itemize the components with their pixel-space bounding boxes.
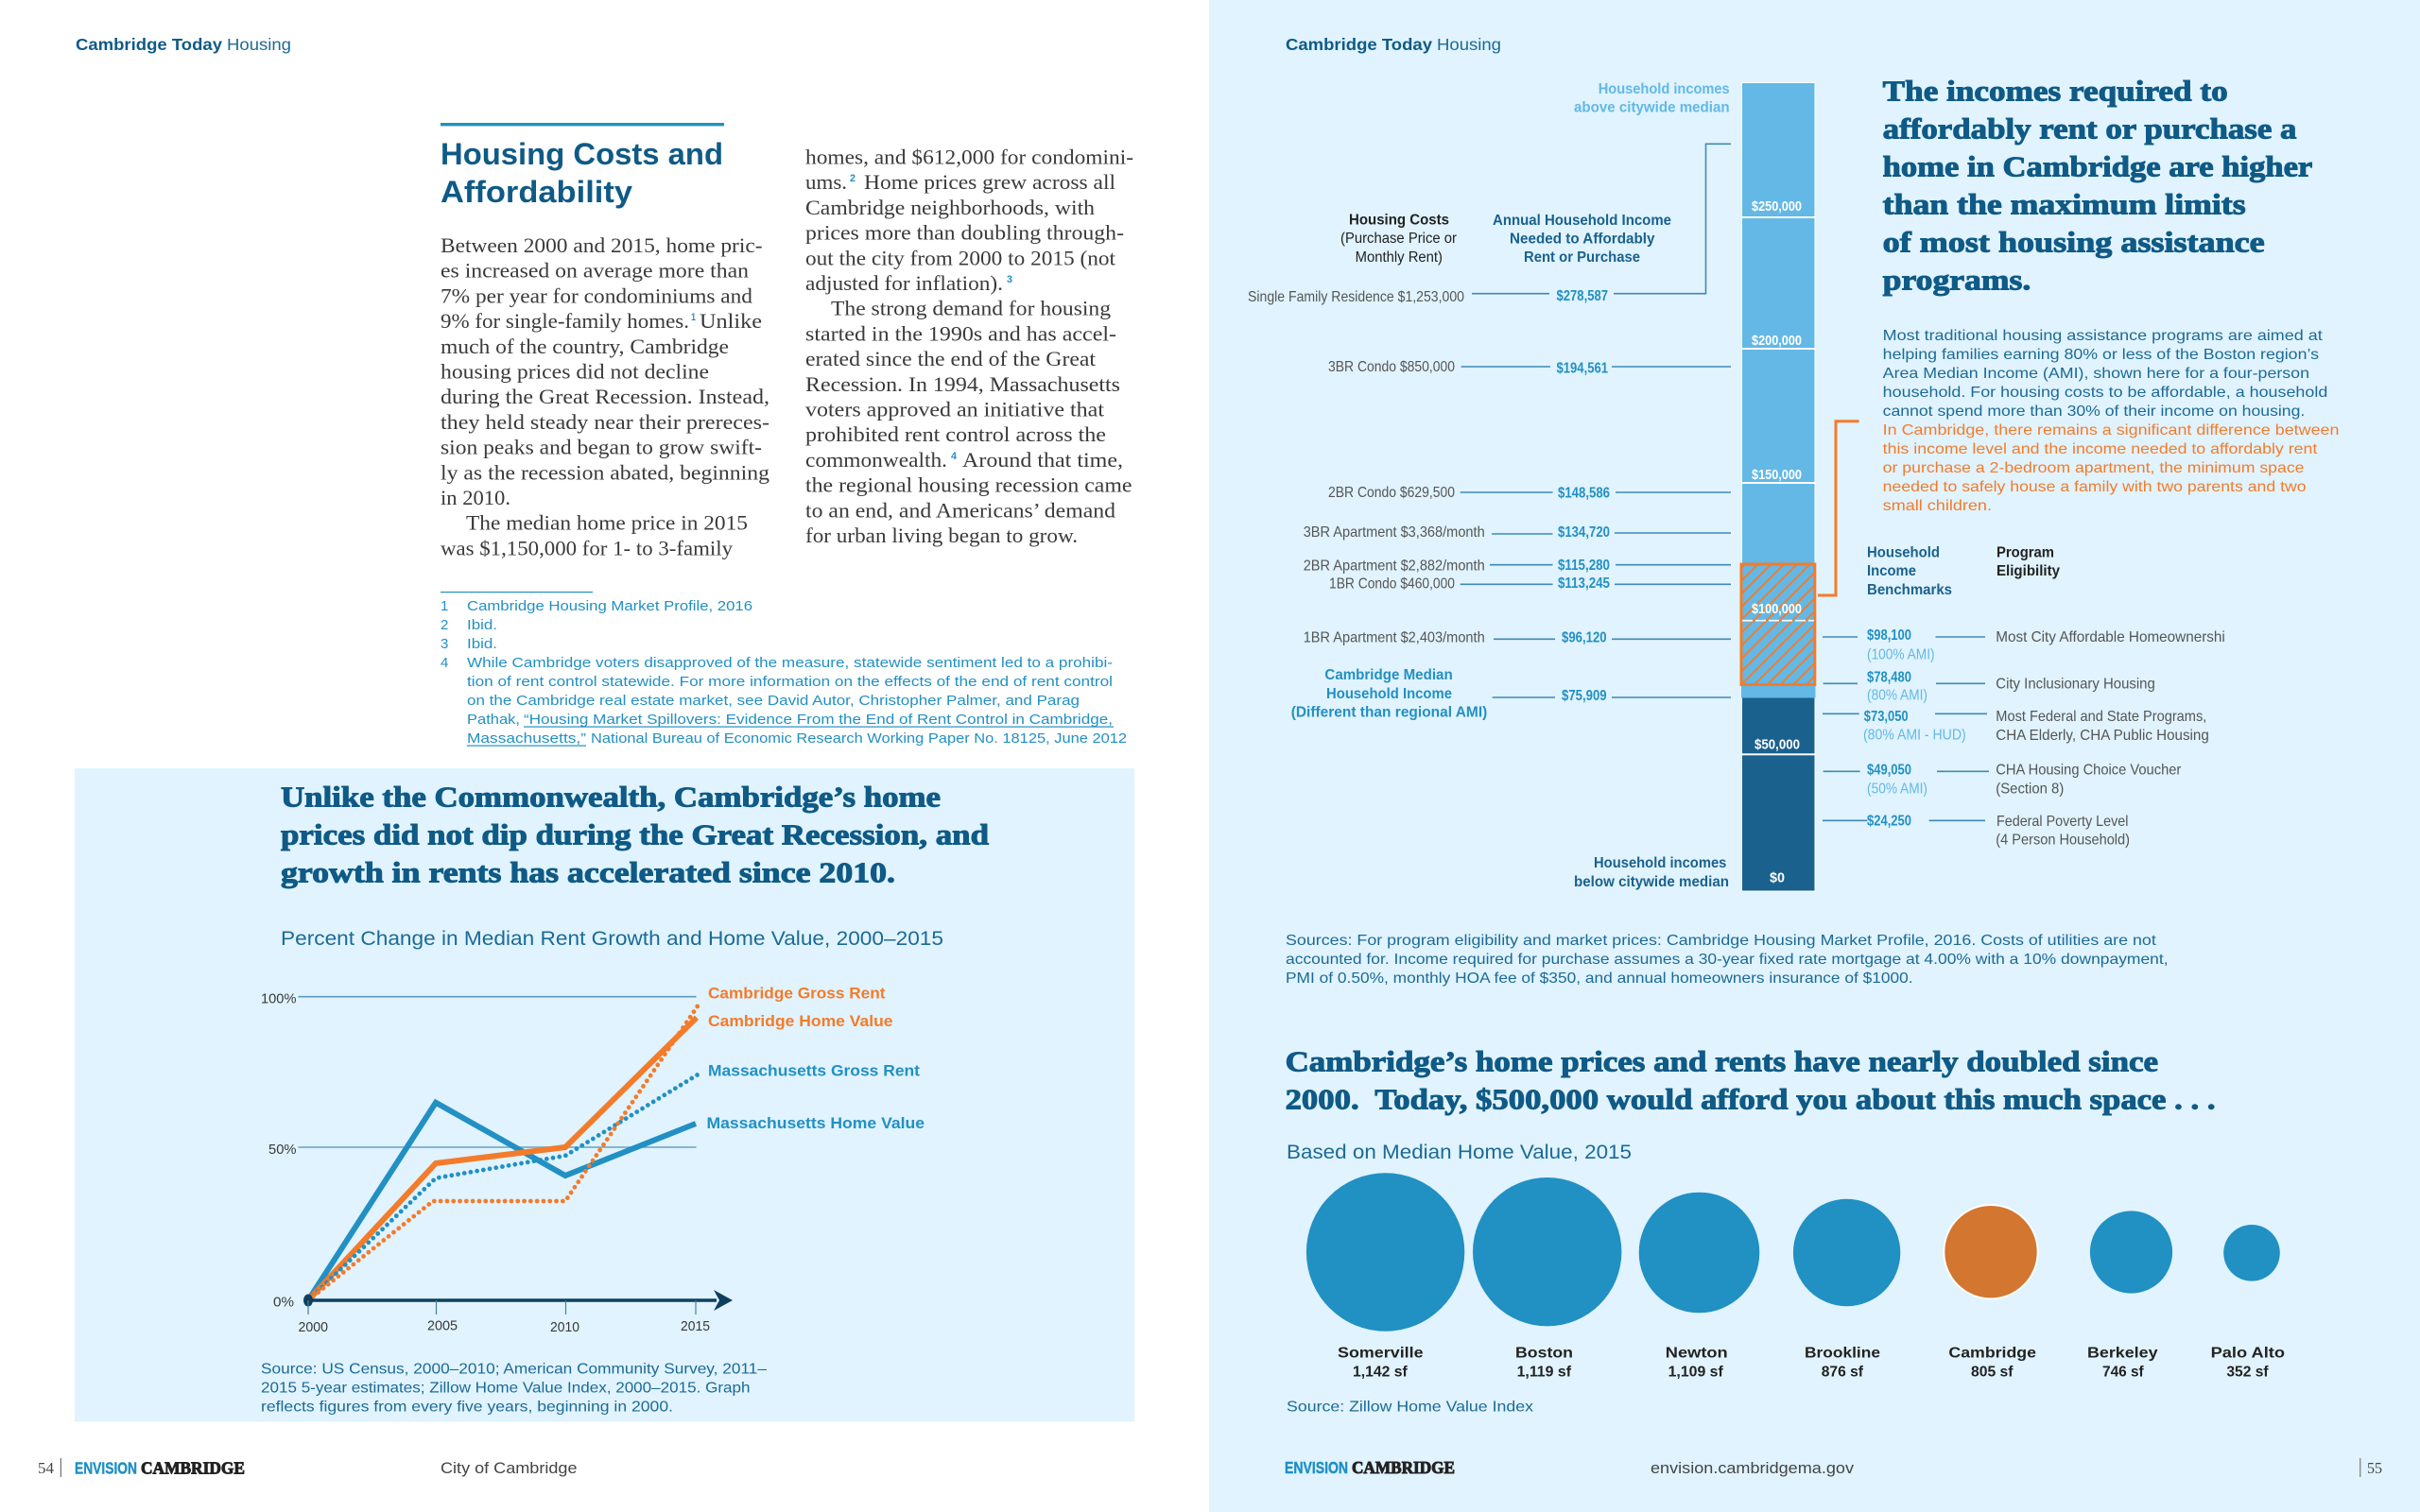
- body text: left column: during the Great Recession. Instead,: [441, 385, 769, 408]
- article heading: Housing Costs and: [441, 137, 723, 171]
- label: incomes below median: Household incomes: [1594, 855, 1726, 871]
- body text: right column: 3: [1007, 274, 1012, 285]
- benchmark: 50% AMI: $49,050: [1867, 763, 1911, 779]
- body text: right column: commonwealth.: [805, 448, 947, 472]
- right page header: Cambridge Today: [1286, 35, 1432, 54]
- series: Cambridge home value: [308, 1018, 697, 1300]
- row: Cambridge median household income: [1291, 667, 1731, 721]
- benchmark: 100% AMI: $98,100: [1867, 627, 1911, 644]
- benchmark: 80% AMI HUD: (80% AMI - HUD): [1863, 728, 1966, 744]
- text block: housing assistance explanation: helping families earning 80% or less of the Boston region’s: [1883, 347, 2319, 363]
- body text: right column: erated since the end of the Great: [805, 347, 1097, 370]
- text block: housing assistance explanation: household. For housing costs to be affordable, a household: [1883, 385, 2327, 401]
- body text: left column: 7% per year for condominiums and: [441, 284, 752, 307]
- row: 3BR apartment: $134,720: [1558, 524, 1610, 541]
- body text: right column: for urban living began to grow.: [805, 524, 1078, 547]
- row: Cambridge median household income: Cambridge Median: [1324, 667, 1453, 683]
- line chart: [261, 986, 925, 1335]
- row: 2BR apartment: $115,280: [1558, 558, 1610, 574]
- footnotes: 3: [441, 636, 448, 652]
- income bar: [1741, 82, 1815, 892]
- chart source: 2015 5-year estimates; Zillow Home Value Index, 2000–2015. Graph: [261, 1381, 751, 1397]
- row: 1BR apartment: 1BR Apartment $2,403/month: [1304, 629, 1485, 645]
- body text: right column: started in the 1990s and has accel-: [805, 321, 1116, 345]
- body text: right column: Cambridge neighborhoods, with: [805, 196, 1095, 219]
- orange bracket to explanation: [1818, 421, 1859, 595]
- body text: left column: sion peaks and began to grow swift-: [441, 436, 762, 459]
- body text: left column: housing prices did not decline: [441, 359, 709, 384]
- heading: incomes required: of most housing assistance: [1883, 225, 2265, 259]
- right page footer: 55: [2367, 1459, 2382, 1477]
- panel: rent growth and home value chart: [75, 768, 1134, 1421]
- logo: Envision Cambridge: CAMBRIDGE: [1352, 1458, 1455, 1477]
- bar scale labels: $50,000: [1754, 737, 1800, 752]
- callout: affordability gap: or purchase a 2-bedroom apartment, the minimum space: [1883, 460, 2305, 476]
- article heading: [441, 137, 723, 209]
- footnotes: 4: [441, 655, 448, 671]
- body text: left column: they held steady near their prereces-: [441, 410, 769, 434]
- bar scale labels: $200,000: [1752, 333, 1802, 349]
- y axis labels: [261, 991, 297, 1311]
- y axis labels: 50%: [268, 1142, 297, 1158]
- row: 3BR apartment: 3BR Apartment $3,368/month: [1304, 524, 1485, 541]
- benchmark: 80% AMI: (80% AMI): [1867, 688, 1927, 704]
- bubble: Cambridge: [1944, 1205, 2038, 1381]
- bubble: Newton: 1,109 sf: [1668, 1365, 1723, 1381]
- footnotes: While Cambridge voters disapproved of the measure, statewide sentiment led to a prohibi-: [467, 655, 1113, 671]
- bubble: Newton: [1639, 1193, 1759, 1381]
- y axis labels: 0%: [273, 1295, 294, 1311]
- bar scale labels: $100,000: [1752, 601, 1802, 617]
- text block: housing assistance explanation: Most traditional housing assistance programs are aimed at: [1883, 328, 2323, 344]
- body text: right column: out the city from 2000 to 2015 (not: [805, 246, 1116, 269]
- bar scale labels: [1752, 198, 1802, 886]
- series labels: Cambridge Home Value: [708, 1013, 892, 1030]
- series: Cambridge gross rent: [308, 1004, 700, 1300]
- chart source: reflects figures from every five years, beginning in 2000.: [261, 1400, 673, 1416]
- column heading: annual household income: Annual Household Income: [1493, 213, 1671, 229]
- benchmark: 100% AMI: (100% AMI): [1867, 646, 1935, 662]
- x axis labels: 2005: [427, 1318, 458, 1334]
- body text: right column: to an end, and Americans’ demand: [805, 498, 1115, 522]
- bar scale labels: $0: [1770, 869, 1785, 886]
- right page header: [1286, 35, 1501, 54]
- column heading: household income benchmarks: [1867, 544, 1952, 598]
- affordability gap hatched box: [1741, 564, 1815, 684]
- heading: incomes required: home in Cambridge are higher: [1883, 149, 2313, 183]
- panel heading: [281, 781, 989, 888]
- footnotes: tion of rent control statewide. For more information on the effects of the end of rent control: [467, 674, 1113, 690]
- column heading: housing costs: Monthly Rent): [1356, 249, 1443, 266]
- benchmark: 80% AMI: $78,480: [1867, 669, 1911, 685]
- benchmark: 100% AMI: Most City Affordable Homeownership: [1996, 629, 2233, 645]
- benchmark: 80% AMI: [1824, 669, 2155, 704]
- heading: incomes required: than the maximum limits: [1883, 187, 2246, 221]
- benchmark: 50% AMI: CHA Housing Choice Voucher: [1996, 763, 2182, 779]
- body text: left column: es increased on average more than: [441, 259, 749, 283]
- benchmark: federal poverty level: [1823, 814, 2130, 848]
- heading: Cambridge’s home prices and rents have nearly doubled since: [1286, 1045, 2158, 1078]
- body text: right column: 2: [850, 173, 856, 184]
- series labels: Cambridge Gross Rent: [708, 986, 886, 1003]
- footnotes: Ibid.: [467, 617, 497, 633]
- body text: right column: ums.: [805, 170, 847, 194]
- left page header: [76, 35, 291, 54]
- column heading: program eligibility: Program: [1996, 544, 2054, 560]
- heading: incomes required: [1883, 74, 2313, 297]
- left page footer: [38, 1458, 577, 1477]
- footnotes: [441, 592, 1127, 747]
- column heading: annual household income: [1493, 213, 1671, 266]
- series labels: Massachusetts Gross Rent: [708, 1062, 921, 1079]
- row: 2BR condo: 2BR Condo $629,500: [1328, 485, 1455, 501]
- series: Massachusetts gross rent: [308, 1074, 700, 1300]
- right page footer: [1285, 1458, 2382, 1477]
- benchmark: 80% AMI: City Inclusionary Housing: [1996, 677, 2155, 693]
- body text: left column: 1: [691, 312, 696, 323]
- row: Cambridge median household income: $75,909: [1562, 688, 1607, 704]
- benchmark: 50% AMI: (50% AMI): [1867, 781, 1927, 797]
- body text: right column: Around that time,: [962, 448, 1123, 472]
- label: incomes above median: above citywide median: [1574, 100, 1730, 115]
- benchmark: federal poverty level: Federal Poverty Level: [1996, 814, 2128, 830]
- article heading: Affordability: [441, 175, 632, 209]
- benchmark: 80% AMI HUD: Most Federal and State Programs,: [1996, 709, 2206, 725]
- row: Cambridge median household income: Household Income: [1326, 686, 1452, 702]
- row: 1BR condo: [1329, 576, 1731, 592]
- body text: right column: prices more than doubling through-: [805, 221, 1124, 245]
- column heading: program eligibility: [1996, 544, 2060, 579]
- logo: Envision Cambridge: [75, 1458, 245, 1477]
- body text: left column: 9% for single-family homes.: [441, 309, 689, 333]
- body text: left column: in 2010.: [441, 486, 510, 509]
- left page header: Cambridge Today: [76, 35, 222, 54]
- row: 2BR condo: [1328, 485, 1731, 501]
- body text: right column: [805, 146, 1133, 547]
- callout: affordability gap: In Cambridge, there remains a significant difference between: [1883, 422, 2339, 438]
- bubble: Brookline: [1793, 1199, 1900, 1381]
- bubble: Palo Alto: Palo Alto: [2211, 1346, 2285, 1362]
- logo: Envision Cambridge: [1285, 1458, 1455, 1477]
- series labels: [707, 986, 925, 1132]
- bar scale labels: $150,000: [1752, 467, 1802, 483]
- series labels: Massachusetts Home Value: [707, 1115, 925, 1132]
- row: single family residence: Single Family Residence $1,253,000: [1248, 289, 1464, 305]
- column heading: annual household income: Rent or Purchase: [1524, 249, 1640, 266]
- body text: left column: The median home price in 2015: [466, 511, 748, 535]
- body text: right column: homes, and $612,000 for condomini-: [805, 146, 1133, 168]
- column heading: housing costs: [1340, 212, 1457, 266]
- benchmark: 50% AMI: [1824, 763, 2182, 797]
- column heading: household income benchmarks: Household: [1867, 544, 1940, 560]
- panel heading: growth in rents has accelerated since 2010.: [281, 856, 895, 888]
- body text: left column: Unlike: [700, 309, 762, 333]
- connector: single family residence: [1614, 144, 1731, 294]
- bubble: Brookline: Brookline: [1805, 1346, 1880, 1362]
- benchmark: federal poverty level: $24,250: [1867, 814, 1911, 830]
- footnotes: “Housing Market Spillovers: Evidence From the End of Rent Control in Cambridge,: [524, 712, 1113, 728]
- bubble: Cambridge: 805 sf: [1971, 1365, 2014, 1381]
- footnotes: Pathak,: [467, 712, 520, 728]
- left page footer: 54: [38, 1459, 55, 1477]
- bubble: Brookline: 876 sf: [1822, 1365, 1864, 1381]
- column heading: household income benchmarks: Income: [1867, 563, 1916, 579]
- column heading: annual household income: Needed to Affordably: [1510, 231, 1655, 248]
- body text: left column: much of the country, Cambridge: [441, 335, 729, 358]
- row: 1BR condo: 1BR Condo $460,000: [1329, 576, 1455, 592]
- chart source: [261, 1362, 767, 1416]
- panel heading: Unlike the Commonwealth, Cambridge’s home: [281, 781, 941, 813]
- row: 2BR apartment: 2BR Apartment $2,882/month: [1304, 558, 1485, 574]
- row: 3BR apartment: [1304, 524, 1731, 541]
- x axis labels: 2015: [681, 1318, 710, 1334]
- left page header: Housing: [227, 35, 291, 54]
- bubble: Somerville: [1306, 1173, 1464, 1381]
- row: single family residence: [1248, 288, 1608, 305]
- body text: right column: adjusted for inflation).: [805, 271, 1003, 295]
- label: incomes below median: [1574, 855, 1729, 890]
- column heading: housing costs: Housing Costs: [1349, 212, 1449, 228]
- body text: right column: Home prices grew across all: [864, 170, 1115, 194]
- footnotes: 2: [441, 617, 448, 633]
- row: 2BR apartment: [1304, 558, 1731, 574]
- body text: right column: voters approved an initiative that: [805, 397, 1105, 421]
- footnotes: on the Cambridge real estate market, see David Autor, Christopher Palmer, and Parag: [467, 693, 1080, 709]
- body text: left column: ly as the recession abated, beginning: [441, 460, 769, 484]
- footnotes: Ibid.: [467, 636, 497, 652]
- right page header: Housing: [1437, 35, 1501, 54]
- chart source: Source: US Census, 2000–2010; American Community Survey, 2011–: [261, 1362, 767, 1378]
- column heading: program eligibility: Eligibility: [1996, 563, 2060, 579]
- body text: left column: Between 2000 and 2015, home pric-: [441, 233, 762, 257]
- row: single family residence: $278,587: [1556, 288, 1608, 304]
- footnotes: National Bureau of Economic Research Working Paper No. 18125, June 2012: [591, 730, 1127, 747]
- bubble: Newton: Newton: [1666, 1346, 1728, 1362]
- income ladder sources: Sources: For program eligibility and market prices: Cambridge Housing Market Profile, 2016. Costs of utilities are not: [1286, 933, 2156, 949]
- logo: Envision Cambridge: ENVISION: [1285, 1458, 1348, 1477]
- callout: affordability gap: small children.: [1883, 498, 1992, 514]
- bubble: Berkeley: 746 sf: [2102, 1365, 2144, 1381]
- row: 1BR condo: $113,245: [1558, 576, 1610, 592]
- text block: housing assistance explanation: [1883, 328, 2339, 514]
- logo: Envision Cambridge: ENVISION: [75, 1458, 137, 1477]
- bubble: Somerville: Somerville: [1338, 1346, 1424, 1362]
- footnotes: Massachusetts,”: [467, 730, 586, 747]
- bubble: Boston: [1473, 1177, 1621, 1381]
- heading: [1286, 1045, 2216, 1116]
- bubble: Palo Alto: [2211, 1225, 2285, 1381]
- income ladder sources: [1286, 933, 2169, 987]
- bubble: Berkeley: Berkeley: [2087, 1346, 2158, 1362]
- heading: incomes required: affordably rent or purchase a: [1883, 112, 2297, 146]
- heading: incomes required: The incomes required to: [1883, 74, 2228, 108]
- benchmark: 80% AMI HUD: [1823, 709, 2209, 744]
- bubble: Somerville: 1,142 sf: [1353, 1365, 1408, 1381]
- footnotes: Cambridge Housing Market Profile, 2016: [467, 598, 752, 614]
- benchmark: 80% AMI HUD: CHA Elderly, CHA Public Housing: [1996, 728, 2209, 744]
- benchmark: 100% AMI: [1823, 627, 2233, 662]
- bubble: Cambridge: Cambridge: [1948, 1346, 2036, 1362]
- panel: how much space $500,000 buys: [1286, 1045, 2285, 1415]
- label: incomes above median: [1574, 81, 1730, 115]
- text block: housing assistance explanation: cannot spend more than 30% of their income on housing.: [1883, 404, 2305, 420]
- right page footer: envision.cambridgema.gov: [1651, 1459, 1855, 1477]
- callout: affordability gap: this income level and the income needed to affordably rent: [1883, 441, 2318, 457]
- row: 1BR apartment: [1304, 629, 1731, 645]
- text block: housing assistance explanation: Area Median Income (AMI), shown here for a four-person: [1883, 366, 2309, 382]
- row: 3BR condo: 3BR Condo $850,000: [1328, 359, 1455, 375]
- row: 1BR apartment: $96,120: [1562, 629, 1607, 645]
- subtitle: Based on Median Home Value, 2015: [1287, 1141, 1632, 1163]
- series: Massachusetts home value: [308, 1103, 696, 1300]
- panel: income ladder: [1248, 81, 2233, 892]
- row: 2BR condo: $148,586: [1558, 486, 1610, 501]
- bubble: Berkeley: [2087, 1211, 2172, 1381]
- bubble: Boston: 1,119 sf: [1517, 1365, 1572, 1381]
- bar scale labels: $250,000: [1752, 198, 1802, 215]
- column heading: housing costs: (Purchase Price or: [1340, 231, 1457, 247]
- benchmark: 50% AMI: (Section 8): [1996, 781, 2064, 797]
- benchmark: 80% AMI HUD: $73,050: [1864, 709, 1909, 725]
- column heading: household income benchmarks: Benchmarks: [1867, 582, 1952, 598]
- bubble chart source: Source: Zillow Home Value Index: [1287, 1399, 1533, 1415]
- bubble: Boston: Boston: [1515, 1346, 1573, 1362]
- label: incomes below median: below citywide median: [1574, 874, 1729, 890]
- body text: left column: was $1,150,000 for 1- to 3-family: [441, 536, 734, 559]
- body text: left column: [441, 233, 769, 559]
- x axis labels: [299, 1318, 710, 1335]
- heading: incomes required: programs.: [1883, 263, 2031, 297]
- body text: right column: the regional housing recession came: [805, 473, 1132, 497]
- bubble: Palo Alto: 352 sf: [2226, 1365, 2269, 1381]
- row: 3BR condo: [1328, 359, 1731, 377]
- chart title: Percent Change in Median Rent Growth and Home Value, 2000–2015: [281, 927, 943, 950]
- income ladder sources: PMI of 0.50%, monthly HOA fee of $350, and annual homeowners insurance of $1000.: [1286, 971, 1913, 987]
- heading: 2000. Today, $500,000 would afford you about this much space . . .: [1286, 1083, 2216, 1116]
- y axis labels: 100%: [261, 991, 297, 1007]
- body text: right column: 4: [951, 451, 958, 462]
- income ladder sources: accounted for. Income required for purchase assumes a 30-year fixed rate mortgage at 4.00% with a 10% downpayment,: [1286, 952, 2169, 968]
- article: housing costs and affordability: [441, 123, 1133, 747]
- callout: affordability gap: needed to safely house a family with two parents and two: [1883, 479, 2307, 495]
- x axis labels: 2000: [299, 1319, 328, 1335]
- logo: Envision Cambridge: CAMBRIDGE: [141, 1458, 245, 1477]
- row: Cambridge median household income: (Different than regional AMI): [1291, 705, 1487, 721]
- callout: affordability gap: [1883, 422, 2339, 514]
- x axis arrow: [303, 1290, 733, 1314]
- footnotes: 1: [441, 598, 448, 614]
- body text: right column: prohibited rent control across the: [805, 422, 1106, 446]
- benchmark: federal poverty level: (4 Person Household): [1996, 832, 2130, 848]
- body text: right column: Recession. In 1994, Massachusetts: [805, 372, 1120, 396]
- panel heading: prices did not dip during the Great Recession, and: [281, 818, 989, 850]
- x axis labels: 2010: [550, 1319, 579, 1335]
- label: incomes above median: Household incomes: [1599, 81, 1730, 97]
- left page footer: City of Cambridge: [441, 1459, 577, 1477]
- row: 3BR condo: $194,561: [1556, 361, 1608, 377]
- body text: right column: The strong demand for housing: [831, 297, 1111, 320]
